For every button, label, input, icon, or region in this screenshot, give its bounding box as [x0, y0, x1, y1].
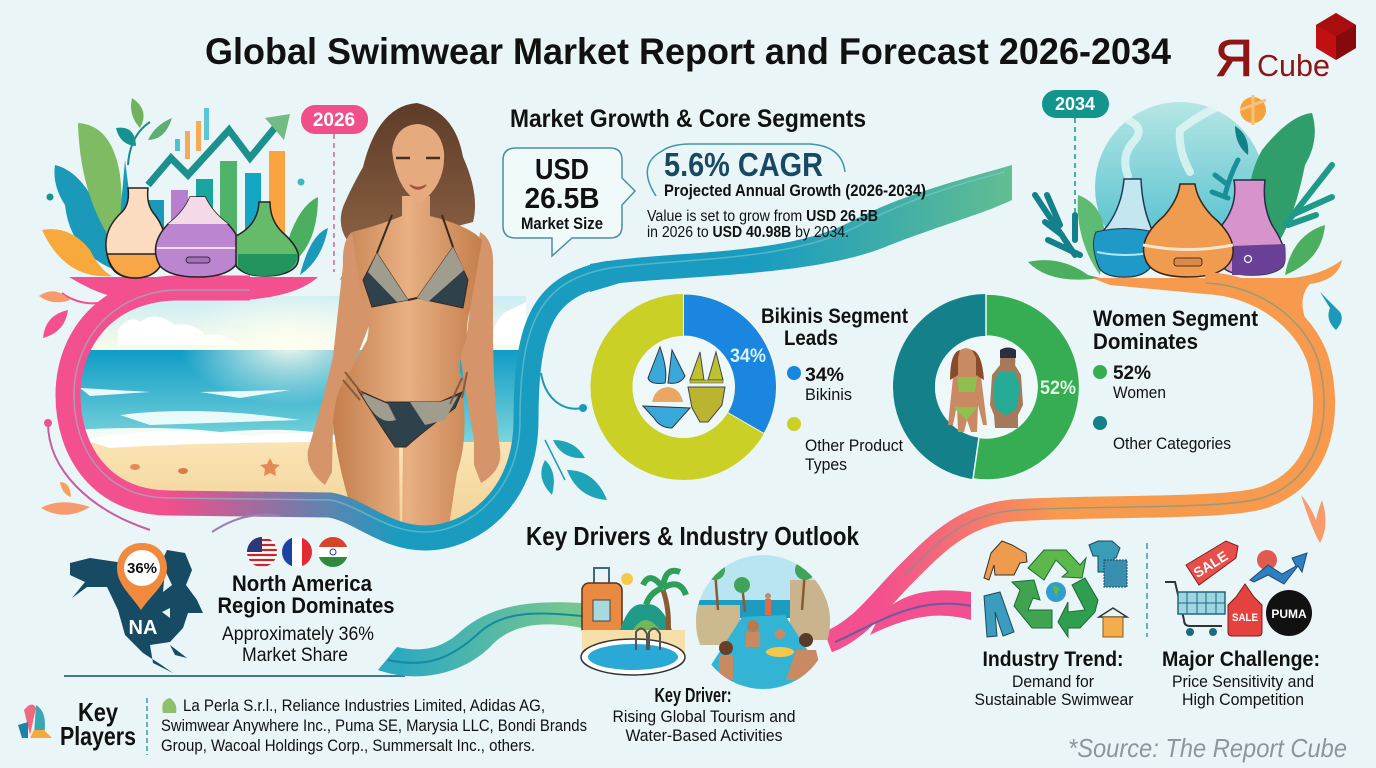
- text: key driver: Rising Global Tourism and: [612, 707, 796, 726]
- heading: bikinis segment: [761, 305, 908, 350]
- legend: bikinis: Bikinis: [805, 385, 852, 404]
- icon: North America map: NA: [129, 617, 157, 639]
- icon: shopping cart: [1165, 582, 1225, 636]
- bar chart: growth bars: [148, 108, 285, 253]
- beach scene: [80, 296, 526, 522]
- logo: RCube: [1215, 13, 1356, 88]
- text: industry trend: [974, 648, 1134, 709]
- icons: country flags: [247, 537, 348, 567]
- icon: two women: [948, 348, 1023, 432]
- icon: wood diffuser: [1143, 184, 1233, 277]
- callout: CAGR: Value is set to grow from USD 26.5B: [647, 208, 878, 225]
- icon: sale tags and price pressure: SALE: [1232, 612, 1258, 624]
- text: key driver: Key Driver:: [654, 685, 732, 707]
- icon: suitcase and pool: [581, 568, 686, 675]
- legend: bikinis: 34%: [805, 365, 844, 386]
- flow ribbon: orange to pink: [828, 260, 1342, 642]
- key players block: Players: [60, 721, 136, 751]
- text: North America: North America: [232, 571, 373, 596]
- icon: recycled clothing: [984, 541, 1127, 637]
- chart: bikinis donut: [612, 294, 776, 459]
- swim top: [363, 215, 468, 308]
- icon: key players: [18, 704, 52, 738]
- callout: CAGR: [647, 144, 926, 241]
- callout: CAGR: in 2026 to USD 40.98B by 2034.: [647, 224, 849, 241]
- legend: women: Women: [1113, 383, 1166, 402]
- icon: left plants and growth chart: [42, 98, 328, 278]
- chart: bikinis donut: 34%: [730, 346, 766, 367]
- text: North America: Region Dominates: [218, 593, 394, 618]
- title: Global Swimwear Market Report and Forecast 2026-2034: [205, 31, 1171, 72]
- logo: RCube: Cube: [1257, 48, 1330, 83]
- text: key driver: [612, 685, 796, 745]
- heading: market growth: Market Growth & Core Segments: [510, 105, 866, 133]
- face: [392, 124, 444, 203]
- legend: women: Other Categories: [1113, 434, 1231, 453]
- text: major challenge: Price Sensitivity and: [1172, 672, 1314, 691]
- flow ribbon: teal to green: [64, 602, 582, 676]
- icon: small leaf: [162, 698, 176, 713]
- recycle arrows: [1012, 550, 1098, 637]
- text: industry trend: Sustainable Swimwear: [974, 690, 1134, 709]
- year marker: 2034: 2034: [1055, 94, 1095, 114]
- key players block: Swimwear Anywhere Inc., Puma SE, Marysia LLC, Bondi Brands: [161, 716, 587, 735]
- icon: location pin: 36%: [127, 560, 157, 577]
- body: [333, 196, 482, 540]
- logo: RCube: Я: [1215, 30, 1253, 88]
- callout: market size: Market Size: [521, 214, 603, 233]
- callout: market size: USD: [535, 154, 589, 186]
- callout: market size: [503, 148, 635, 256]
- icon: sale tags and price pressure: [1165, 541, 1312, 636]
- icon: sale tags and price pressure: PUMA: [1271, 607, 1307, 621]
- year marker: 2034: [1042, 90, 1109, 212]
- icon: green diffuser: [236, 202, 299, 276]
- text: major challenge: [1162, 648, 1320, 709]
- legend: bikinis: Other Product: [805, 436, 903, 455]
- small branch and leaves by the donut: [541, 373, 607, 500]
- heading: women segment: [1093, 306, 1259, 354]
- key players block: Group, Wacoal Holdings Corp., Summersalt Inc., others.: [161, 736, 535, 755]
- text: industry trend: Demand for: [1012, 672, 1094, 691]
- arms: [308, 232, 500, 485]
- year marker: 2026: [301, 105, 368, 272]
- callout: market size: 26.5B: [524, 183, 600, 215]
- text: industry trend: Industry Trend:: [982, 648, 1124, 671]
- key players block: La Perla S.r.l., Reliance Industries Limited, Adidas AG,: [183, 696, 545, 715]
- illustration: resort pool: [695, 555, 833, 690]
- key players block: [18, 696, 587, 755]
- illustration: woman in swimwear: [308, 103, 500, 540]
- heading: key drivers: Key Drivers & Industry Outlook: [526, 521, 859, 551]
- icon: sale tags and price pressure: SALE: [1190, 547, 1231, 581]
- right plants and aroma cloud: [1028, 95, 1332, 280]
- hair: [340, 103, 475, 280]
- icon: blue diffuser: [1093, 179, 1157, 277]
- legend: women: [1093, 363, 1231, 453]
- heading: bikinis segment: Bikinis Segment: [761, 305, 908, 328]
- text: major challenge: Major Challenge:: [1162, 648, 1320, 671]
- flow ribbon: pink to teal: [68, 165, 1012, 538]
- text: North America: [218, 571, 394, 666]
- icon: purple diffuser right: [1222, 180, 1286, 275]
- legend: bikinis: [787, 365, 903, 474]
- text: North America: Approximately 36%: [222, 624, 374, 645]
- legend: bikinis: Types: [805, 455, 847, 474]
- callout: CAGR: Projected Annual Growth (2026-2034): [664, 182, 926, 200]
- year marker: 2026: 2026: [313, 110, 355, 131]
- heading: bikinis segment: Leads: [784, 327, 838, 350]
- text: major challenge: High Competition: [1182, 690, 1304, 709]
- swim bottom: [343, 372, 467, 447]
- arrow: growth trend: [148, 124, 278, 185]
- icon: purple diffuser: [156, 197, 240, 277]
- source note: *Source: The Report Cube: [1068, 733, 1347, 763]
- icon: bikini sets: [643, 347, 725, 428]
- heading: women segment: Women Segment: [1093, 306, 1259, 331]
- chart: women donut: 52%: [1040, 378, 1076, 399]
- text: North America: Market Share: [242, 645, 348, 666]
- heading: women segment: Dominates: [1093, 329, 1198, 354]
- icon: cream diffuser: [106, 188, 166, 278]
- decorative leaves: left ribbon: [39, 291, 280, 532]
- icon: North America map: [70, 543, 203, 673]
- callout: CAGR: 5.6% CAGR: [664, 146, 823, 183]
- chart: women donut: [914, 294, 1080, 480]
- legend: women: 52%: [1113, 363, 1151, 384]
- key players block: Key: [78, 697, 118, 727]
- text: key driver: Water-Based Activities: [626, 726, 782, 745]
